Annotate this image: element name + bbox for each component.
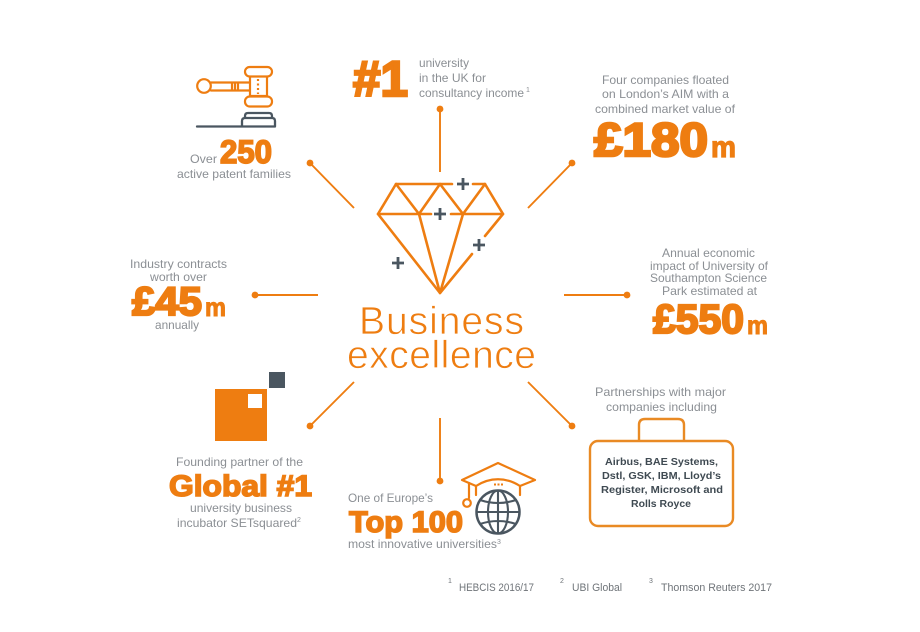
footnotes: UBI Global <box>572 582 622 594</box>
footnotes: 2 <box>560 578 564 585</box>
stat: industry contracts: Industry contracts <box>130 257 227 271</box>
stat: science park: Annual economic <box>662 246 755 260</box>
stat: Top 100 <box>348 491 501 551</box>
stat: AIM companies: combined market value of <box>595 102 736 116</box>
stat: industry contracts: worth over <box>149 270 207 284</box>
title <box>347 300 536 377</box>
stat: science park: Park estimated at <box>662 284 758 298</box>
icon: graduation globe <box>462 463 535 534</box>
icon: briefcase with partner names <box>590 419 733 526</box>
stat: Global number one: university business <box>190 501 292 515</box>
stat: AIM companies <box>594 73 736 166</box>
stat: Global number one: 2 <box>297 517 301 524</box>
stat: Global number one: Global #1 <box>169 470 312 503</box>
icon: squares <box>215 372 285 441</box>
icon: briefcase with partner names: Airbus, BAE Systems, <box>605 456 718 468</box>
connector lines with dots <box>252 106 630 484</box>
stat: Global number one: incubator SETsquared <box>177 516 297 530</box>
stat: industry contracts <box>130 257 227 332</box>
stat: science park: £550 <box>653 296 744 342</box>
stat: patent families: Over <box>190 152 217 166</box>
stat: Top 100: One of Europe’s <box>348 491 433 505</box>
title: Business <box>359 300 524 343</box>
stat: science park: Southampton Science <box>650 271 767 285</box>
stat: number one for consultancy: university <box>419 56 469 70</box>
stat: number one for consultancy: 1 <box>526 87 530 94</box>
stat: science park: m <box>747 310 768 340</box>
stat: Top 100: 3 <box>497 539 501 546</box>
stat: partnerships heading: Partnerships with major <box>595 385 726 399</box>
icon: diamond <box>378 178 503 293</box>
footnotes: 1 <box>448 578 452 585</box>
icon: briefcase with partner names: Dstl, GSK, IBM, Lloyd’s <box>602 470 721 482</box>
footnotes <box>448 578 772 594</box>
stat: patent families: 250 <box>220 134 272 170</box>
title: excellence <box>347 334 536 377</box>
stat: industry contracts: m <box>205 292 226 322</box>
stat: partnerships heading: companies including <box>606 400 717 414</box>
stat: number one for consultancy: in the UK for <box>419 71 486 85</box>
stat: industry contracts: annually <box>155 318 199 332</box>
stat: number one for consultancy: #1 <box>353 51 408 107</box>
icon: gavel <box>197 67 275 126</box>
footnotes: Thomson Reuters 2017 <box>661 582 772 594</box>
stat: AIM companies: m <box>711 131 736 164</box>
stat: science park <box>650 246 769 342</box>
stat: number one for consultancy <box>353 51 530 107</box>
stat: AIM companies: Four companies floated <box>602 73 729 87</box>
stat: number one for consultancy: consultancy income <box>419 86 524 100</box>
stat: Global number one: Founding partner of the <box>176 455 303 469</box>
stat: Top 100: Top 100 <box>349 506 463 539</box>
footnotes: 3 <box>649 578 653 585</box>
stat: Global number one <box>169 455 312 530</box>
icon: briefcase with partner names: Register, Microsoft and <box>601 484 723 496</box>
stat: Top 100: most innovative universities <box>348 537 497 551</box>
icon: briefcase with partner names: Rolls Royce <box>631 498 691 510</box>
stat: science park: impact of University of <box>650 259 769 273</box>
icon: plus marks <box>392 178 485 269</box>
stat: industry contracts: £45 <box>132 280 202 324</box>
stat: patent families <box>177 134 291 181</box>
stat: AIM companies: on London’s AIM with a <box>602 87 729 101</box>
stat: partnerships heading <box>595 385 726 414</box>
footnotes: HEBCIS 2016/17 <box>459 582 534 594</box>
stat: AIM companies: £180 <box>594 113 708 166</box>
stat: patent families: active patent families <box>177 167 291 181</box>
